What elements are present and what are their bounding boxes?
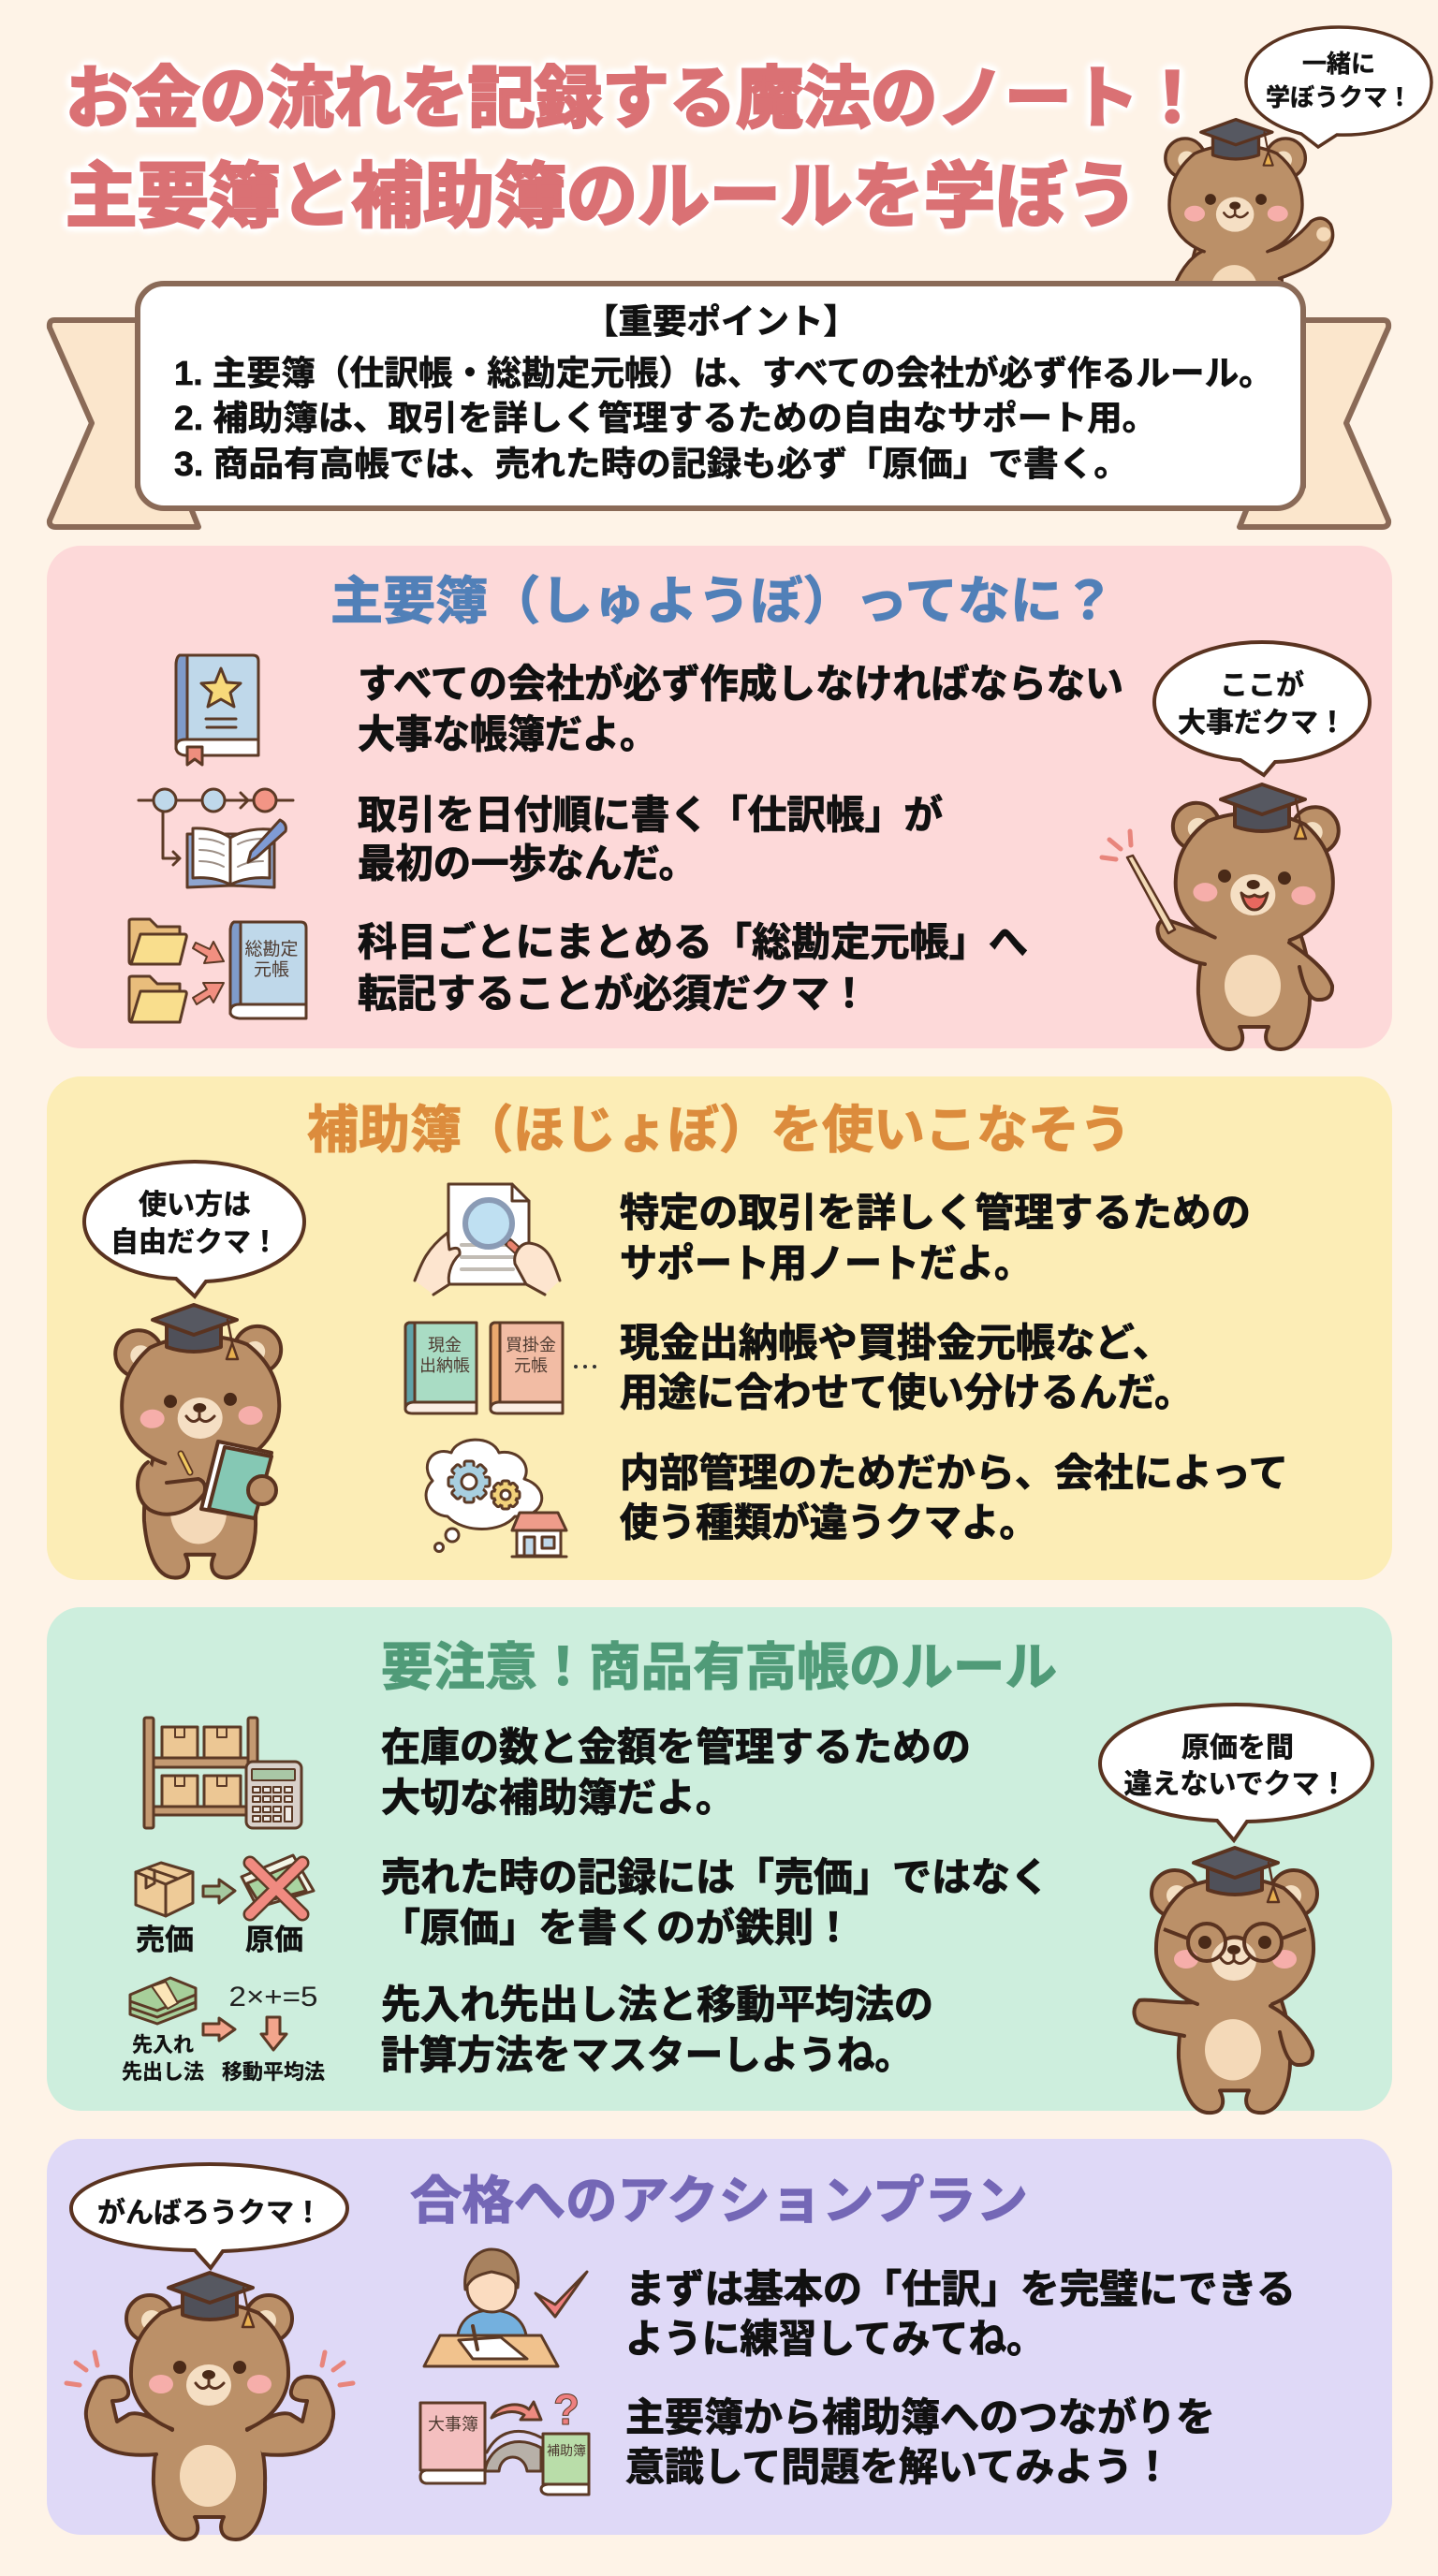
body text: 内部管理のためだから、会社によって — [620, 1451, 1288, 1495]
icon: folders to general ledger — [129, 919, 306, 1022]
body text: 大事な帳簿だよ。 — [358, 712, 657, 756]
body text: ように練習してみてね。 — [625, 2317, 1045, 2361]
banner: key points — [50, 284, 1388, 527]
heading: 主要簿（しゅようぼ）ってなに？ — [330, 572, 1115, 630]
panel: 主要簿 — [47, 546, 1392, 1049]
speech bubble: 自由だクマ！ — [110, 1227, 279, 1258]
body text: 先入れ先出し法と移動平均法の — [381, 1983, 933, 2027]
label: valuation methods: 先出し法 — [122, 2060, 204, 2084]
icon: subsidiary ledgers: 買掛金 — [506, 1336, 556, 1354]
icon: selling price crossed out to cost — [136, 1855, 314, 1916]
icon: books connected by bridge: 補助簿 — [547, 2443, 586, 2458]
heading: 補助簿（ほじょぼ）を使いこなそう — [307, 1101, 1131, 1159]
title: お金の流れを記録する魔法のノート！ — [66, 62, 1206, 137]
green panel background — [47, 1607, 1392, 2111]
body text: サポート用ノートだよ。 — [620, 1241, 1032, 1285]
pink panel background — [47, 546, 1392, 1048]
icon: thought cloud with gears and shop — [426, 1440, 566, 1557]
icon: shelf and calculator — [144, 1718, 301, 1828]
mascot: flexing bear — [66, 2273, 353, 2539]
title: 主要簿と補助簿のルールを学ぼう — [66, 157, 1138, 237]
label: valuation methods — [122, 1982, 325, 2084]
speech bubble — [71, 2164, 347, 2268]
speech bubble — [84, 1162, 304, 1296]
title — [66, 62, 1206, 237]
label: 売価 / 原価: 売価 — [136, 1924, 194, 1956]
mascot: waving bear at top — [1166, 120, 1333, 344]
body text — [625, 2267, 1296, 2489]
body text: 現金出納帳や買掛金元帳など、 — [620, 1321, 1172, 1365]
icon: inventory valuation methods — [130, 1978, 286, 2050]
yellow panel background — [47, 1076, 1392, 1580]
icon: books connected by bridge — [420, 2385, 589, 2495]
key points text: 【重要ポイント】 — [584, 302, 858, 341]
key points text: 1. 主要簿（仕訳帳・総勘定元帳）は、すべての会社が必ず作るルール。 — [174, 354, 1273, 392]
body text: 在庫の数と金額を管理するための — [381, 1725, 971, 1769]
speech bubble: 違えないでクマ！ — [1123, 1769, 1348, 1800]
label: 売価 / 原価 — [136, 1924, 303, 1956]
heading: 要注意！商品有高帳のルール — [381, 1638, 1057, 1696]
body text: 「原価」を書くのが鉄則！ — [381, 1906, 853, 1950]
body text: 特定の取引を詳しく管理するための — [620, 1191, 1251, 1235]
body text — [358, 662, 1123, 1016]
panel: 商品有高帳 — [47, 1607, 1392, 2113]
icon: subsidiary ledgers: 出納帳 — [419, 1356, 470, 1375]
speech bubble: top — [1246, 27, 1431, 147]
body text: 大切な補助簿だよ。 — [381, 1776, 735, 1820]
panel: 合格へのアクションプラン — [47, 2139, 1392, 2539]
icon: books connected by bridge: 大事簿 — [428, 2415, 478, 2434]
speech bubble: top: 学ぼうクマ！ — [1266, 83, 1412, 111]
icon: document with magnifier and hands — [415, 1184, 560, 1295]
body text: 取引を日付順に書く「仕訳帳」が — [358, 793, 943, 837]
icon: books connected by bridge: ? — [553, 2385, 580, 2434]
key points text: 2. 補助簿は、取引を詳しく管理するための自由なサポート用。 — [174, 399, 1157, 437]
body text: まずは基本の「仕訳」を完璧にできる — [625, 2267, 1296, 2311]
ribbon tail right — [1240, 320, 1388, 527]
label: 売価 / 原価: 原価 — [245, 1924, 303, 1956]
icon: ledger book with star — [176, 655, 258, 765]
speech bubble: top: 一緒に — [1302, 50, 1375, 78]
speech bubble: 大事だクマ！ — [1178, 708, 1346, 739]
heading: 合格へのアクションプラン — [410, 2172, 1028, 2230]
icon: subsidiary ledgers: 元帳 — [514, 1356, 548, 1375]
body text: 用途に合わせて使い分けるんだ。 — [620, 1370, 1193, 1414]
body text — [620, 1191, 1288, 1544]
icon: journal timeline — [139, 789, 293, 887]
icon: subsidiary ledgers — [405, 1323, 596, 1413]
body text: 最初の一歩なんだ。 — [358, 842, 697, 886]
mascot: bear with pointer — [1102, 784, 1340, 1049]
icon: folders to general ledger: 総勘定 — [244, 939, 299, 959]
speech bubble: 原価を間 — [1181, 1733, 1294, 1764]
speech bubble — [1100, 1705, 1372, 1840]
speech bubble: 使い方は — [139, 1190, 251, 1221]
label: valuation methods: 2×+=5 — [228, 1982, 318, 2012]
key points box — [138, 284, 1303, 508]
ribbon tail left — [50, 320, 198, 527]
body text: 使う種類が違うクマよ。 — [620, 1500, 1037, 1544]
body text: 計算方法をマスターしようね。 — [381, 2033, 913, 2077]
mascot: bear with glasses — [1134, 1848, 1317, 2113]
body text: 科目ごとにまとめる「総勘定元帳」へ — [358, 920, 1028, 964]
body text — [381, 1725, 1049, 2077]
mascot: bear with notebook — [114, 1305, 285, 1578]
label: valuation methods: 移動平均法 — [222, 2060, 325, 2084]
body text: 意識して問題を解いてみよう！ — [625, 2445, 1172, 2489]
key points text: 3. 商品有高帳では、売れた時の記録も必ず「原価」で書く。 — [174, 445, 1129, 483]
body text: 主要簿から補助簿へのつながりを — [625, 2395, 1215, 2439]
speech bubble — [1154, 642, 1370, 775]
body text: すべての会社が必ず作成しなければならない — [358, 662, 1123, 706]
label: valuation methods: 先入れ — [132, 2033, 194, 2056]
panel: 補助簿 — [47, 1076, 1392, 1580]
icon: subsidiary ledgers: 現金 — [428, 1336, 462, 1354]
speech bubble: ここが — [1220, 669, 1304, 701]
body text: 転記することが必須だクマ！ — [358, 972, 869, 1016]
key points text — [174, 302, 1273, 483]
speech bubble: がんばろうクマ！ — [97, 2197, 322, 2229]
purple panel background — [47, 2139, 1392, 2535]
icon: folders to general ledger: 元帳 — [254, 959, 289, 980]
icon: student studying with check — [424, 2249, 587, 2366]
body text: 売れた時の記録には「売価」ではなく — [381, 1855, 1049, 1899]
